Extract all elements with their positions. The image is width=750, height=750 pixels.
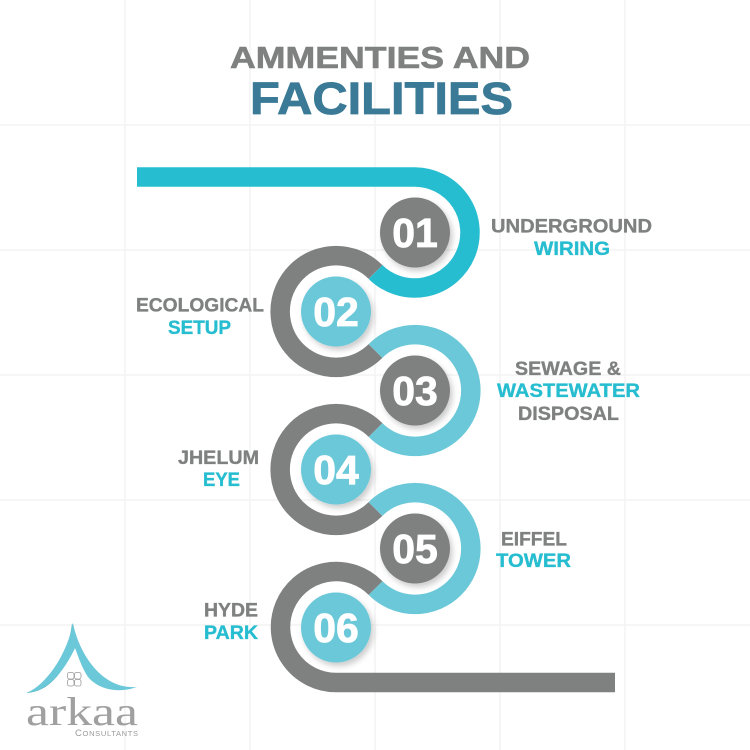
item 05 badge — [380, 514, 450, 584]
item 06 label: HYDE — [204, 600, 258, 622]
path segment 5 — [376, 493, 471, 604]
item 03 badge: 03 — [392, 368, 438, 414]
item 01 label: WIRING — [534, 239, 610, 260]
path segment 1 — [137, 177, 470, 288]
logo: arkaa consultants — [26, 623, 138, 739]
path segment 2 — [280, 256, 376, 367]
item 04 label: EYE — [203, 470, 240, 491]
item 04 badge — [301, 434, 371, 504]
item 02 badge — [301, 276, 371, 346]
item 01 badge: 01 — [392, 210, 438, 256]
item 03 badge — [380, 356, 450, 426]
logo tagline: CONSULTANTS — [75, 728, 138, 739]
item 02 label: ECOLOGICAL — [136, 296, 264, 316]
item 01 badge — [380, 198, 450, 268]
item 06 badge — [301, 592, 371, 662]
title line 2: FACILITIES — [250, 73, 513, 124]
title — [230, 40, 530, 124]
item 06 label — [204, 600, 258, 644]
item 06 badge: 06 — [313, 605, 359, 651]
path segment 3 — [376, 335, 471, 446]
logo wordmark: arkaa — [26, 689, 138, 734]
path segment 6 — [281, 571, 615, 682]
item 03 label: SEWAGE & — [515, 359, 621, 380]
title line 1: AMMENTIES AND — [230, 40, 530, 75]
item 03 label — [497, 359, 640, 425]
path segment 4 — [280, 414, 376, 525]
item 03 label: WASTEWATER — [497, 381, 640, 402]
winding path — [137, 177, 615, 682]
item 06 label: PARK — [204, 623, 258, 644]
item 01 label — [491, 216, 652, 260]
item 05 label — [496, 530, 571, 572]
item 05 label: EIFFEL — [501, 530, 567, 550]
item 02 badge: 02 — [313, 289, 359, 335]
icon: flower — [68, 672, 81, 686]
icon: roof — [26, 623, 137, 693]
item 01 label: UNDERGROUND — [491, 216, 652, 238]
item 02 label — [136, 296, 264, 339]
item 04 badge: 04 — [313, 447, 359, 493]
item 03 label: DISPOSAL — [518, 404, 619, 425]
item 02 label: SETUP — [168, 318, 231, 339]
item 04 label: JHELUM — [178, 448, 259, 469]
item 04 label — [178, 448, 259, 491]
item 05 label: TOWER — [496, 551, 571, 572]
item 05 badge: 05 — [392, 526, 438, 572]
